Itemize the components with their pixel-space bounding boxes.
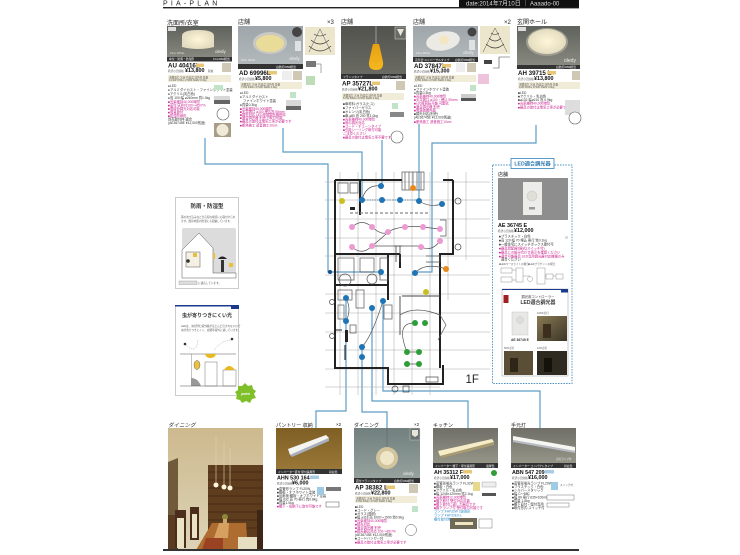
product: 店舗 downlight ×3: ファインホワイト塗装 — [243, 98, 277, 103]
product: 洗面所/衣室: 消費電力 光束 色温度 演色性 質量 — [169, 76, 209, 80]
product: ダイニング pendant ×2 — [354, 422, 420, 544]
product: 玄関ホール: ■LED — [518, 91, 527, 95]
product: ダイニング pendant ×2: ■調光器具対応 100〜85/7% — [355, 528, 396, 534]
product: 店舗 downlight ×3: AD 69996L — [239, 70, 271, 77]
panel: LED適合調光器: ■器具との組み合わせ表示を確認ください — [499, 250, 561, 254]
product: 店舗 downlight ×3: oledy — [289, 56, 301, 61]
product: パントリー 収納 — [276, 422, 342, 508]
product: キッチン: ■棚下ランプ付 壁付取付可能です — [434, 505, 484, 510]
panel: 防雨・防湿型: 雨の吹き込みなどが心配な場所にも取付けられ — [181, 215, 236, 219]
product: 店舗 universal downlight ×2: ■光束維持40,000時間 — [414, 94, 447, 98]
product: キッチン: 棚付取付時 — [434, 516, 451, 522]
product: 店舗 pendant: ■光束維持40,000時間 — [343, 116, 376, 122]
product: 手元灯: 希望小売価格 — [512, 476, 528, 480]
panel: LED適合調光器: ■適合可能器具 LED専用調光器対応機種のみ — [499, 254, 565, 258]
photo: ダイニング — [168, 422, 263, 550]
product: 店舗 downlight ×3: ■器具の取付は電気工事が必要です — [240, 118, 292, 124]
product: キッチン: インバーター 棚下・壁付兼用形 — [435, 464, 475, 468]
product: 手元灯: ABN 547 209 — [512, 470, 545, 476]
panel: LED適合調光器: 適合ください — [501, 256, 521, 262]
panel: 防雨・防湿型 — [176, 198, 238, 288]
panel: LED適合調光器: ■LEDベースライトの場合 — [499, 262, 529, 266]
product: 店舗 pendant: 店舗 — [341, 18, 353, 26]
product: ダイニング pendant ×2: 白熱灯60W相当 — [394, 479, 414, 483]
product: ダイニング pendant ×2: ■適合調光器 別売 — [355, 525, 382, 530]
product: 店舗 pendant: 白熱灯60W相当 — [382, 75, 402, 79]
product: 店舗 universal downlight ×2: 白熱灯60W相当 — [455, 58, 475, 62]
product: 店舗 downlight ×3: ●LED — [240, 91, 249, 95]
wiring diagram — [501, 268, 563, 284]
product: ダイニング pendant ×2: ■光束維持40,000時間 — [355, 518, 388, 523]
product: 洗面所/衣室: 13.3W 970lm 2700K Ra82 0.9kg — [169, 78, 207, 82]
product: 店舗 pendant: 希望小売価格 — [342, 88, 358, 92]
product: 店舗 downlight ×3 — [238, 18, 335, 128]
product: キッチン: 希望小売価格 — [434, 476, 450, 480]
panel: 防雨・防湿型: に適応しています。 — [198, 281, 221, 285]
lighting markers: pink — [349, 224, 443, 250]
product: 店舗 pendant: ¥21,800 — [358, 86, 378, 92]
product: 店舗 downlight ×3: ●アルミダイカスト — [240, 94, 268, 99]
product: 店舗 downlight ×3: 店舗 — [238, 18, 250, 26]
product: 店舗 universal downlight ×2: ×2 — [504, 20, 512, 26]
product: キッチン: 電球色 — [486, 464, 495, 468]
lighting markers: green — [404, 320, 428, 367]
product: 店舗 pendant: フランジタイプ — [343, 75, 363, 79]
dimmer photo — [498, 178, 568, 220]
product: 洗面所/衣室: 傘付・防雨・防湿形 — [169, 57, 194, 61]
product: 手元灯: 手元灯 — [511, 422, 526, 429]
connector lines — [205, 124, 540, 428]
product: 店舗 universal downlight ×2: ■電源装置内蔵 — [414, 108, 436, 112]
inner card: LED適合調光器: 50%点灯 — [504, 346, 515, 350]
product: 店舗 universal downlight ×2: (AE36745E ¥12,000別途) — [414, 114, 451, 120]
product: ダイニング pendant ×2: ■調光対応 — [355, 522, 371, 526]
panel: 虫が寄りつきにくい光: 虫が寄りつきにくい光 — [182, 312, 232, 319]
product: 洗面所/衣室: Fine White — [170, 51, 185, 55]
product: ダイニング pendant ×2: (AE36745E ¥12,000別途) — [355, 532, 392, 537]
product: パントリー 収納: 昼白色 — [329, 470, 338, 474]
photo: ダイニング: ダイニング — [168, 422, 197, 429]
panel: LED適合調光器: ■一般住宅にスイッチボックス取付可 — [499, 242, 554, 246]
product: 店舗 downlight ×3: 消費電力 光束 色温度 演色性 質量 — [241, 82, 281, 86]
product: 洗面所/衣室: 洗面所/衣室 — [167, 19, 199, 27]
product: 店舗 universal downlight ×2: ■適合調光器 別売 — [414, 104, 441, 109]
inner card: LED適合調光器: LED適合調光器 — [520, 299, 556, 306]
product: 洗面所/衣室: ■光束維持40,000時間 — [168, 99, 201, 104]
product: 玄関ホール: 10W 900lm 2700K Ra82 0.9kg — [519, 85, 555, 89]
panel: LED適合調光器 — [492, 158, 572, 384]
inner card: LED適合調光器: 10%点灯 — [537, 346, 548, 350]
point badge: point — [241, 392, 251, 396]
product: 洗面所/衣室: ●LED — [168, 84, 177, 88]
product: ダイニング pendant ×2: ■器具の取付は電気工事が必要です — [355, 540, 407, 544]
product: 洗面所/衣室: ■簡易取付 — [168, 110, 184, 114]
product: キッチン: ■棚下取付 壁付対応可能 — [434, 498, 471, 503]
panel: LED適合調光器: ¥12,000 — [514, 228, 534, 234]
product: 玄関ホール: ■器具の取付は電気工事が必要です — [518, 104, 570, 110]
product: 玄関ホール: AH 39715 L — [518, 70, 552, 77]
product: 店舗 downlight ×3: 希望小売価格 — [239, 77, 255, 81]
product: キッチン: ランプ FHF32EX-L — [434, 512, 462, 518]
product: パントリー 収納: ■棚下・収納下に取付可能です — [277, 504, 323, 508]
product: 洗面所/衣室: 税抜 — [208, 69, 214, 73]
product: 店舗 downlight ×3: ■光束維持40,000時間 — [240, 106, 273, 111]
product: 店舗 downlight ×3: ¥5,800 — [255, 76, 272, 82]
product: 店舗 universal downlight ×2: 高気密 ユニバーサルタイプ — [415, 58, 449, 62]
product: 店舗 universal downlight ×2: ■±20度回転可能 可動式 — [414, 100, 449, 106]
product: 店舗 universal downlight ×2: AD 37847L — [414, 63, 446, 70]
product: キッチン: ■アクリル・乳白色 — [434, 488, 463, 492]
floor plan grid — [325, 172, 490, 395]
product: パントリー 収納: パントリー 収納 — [276, 422, 313, 429]
product: 洗面所/衣室: oledy — [215, 49, 227, 54]
panel: LED適合調光器: ■高 120 幅 70 埋込 奥行 質0.1kg — [499, 238, 547, 242]
panel: LED適合調光器: ■器具間配線2線式(スイッチ付) — [499, 246, 545, 250]
lighting markers: orange — [410, 185, 449, 272]
floor label: 1F — [466, 374, 479, 386]
page header: PIA-PLAN — [163, 0, 220, 8]
product: 店舗 downlight ×3: Fine White — [241, 58, 256, 62]
product: 手元灯: 昼白色 — [564, 464, 573, 468]
product: 店舗 downlight ×3: ■調光対応 LED専用調光器併用 — [240, 112, 286, 117]
product: ダイニング pendant ×2: ×2 — [414, 422, 420, 427]
product: 手元灯: 点灯ランプ付 — [556, 457, 572, 461]
product: キッチン: ■直管形蛍光ランプ FL32W — [434, 480, 475, 486]
panel: LED適合調光器: AE 36745 E — [498, 223, 527, 229]
product: パントリー 収納: インバーター直付 壁付兼用形 — [278, 470, 315, 474]
product: パントリー 収納: AHN 530 164 — [277, 476, 310, 482]
lighting markers: yellow — [339, 198, 429, 295]
product: 玄関ホール: ■アクリル・乳白色 — [518, 94, 547, 98]
product: 店舗 downlight ×3: 7.0W 640lm 2700K Ra82 0.3kg — [241, 85, 278, 89]
product: 玄関ホール: 玄関ホール — [517, 18, 547, 26]
product: 玄関ホール: 消費電力 光束 色温度 演色性 質量 — [519, 82, 559, 86]
product: ダイニング pendant ×2: AP 38382 L — [355, 484, 388, 492]
product: 店舗 downlight ×3: ■天井開口 ⌀100 埋込高 55mm — [240, 109, 285, 114]
product: 店舗 downlight ×3: ■適合調光器 別売で取付可能 — [240, 115, 283, 120]
product: 玄関ホール: ■⌀132 幅⌀210 高 0.9kg — [518, 97, 553, 102]
product: 店舗 universal downlight ×2: ■天井開口 ⌀100・埋込 90mm — [414, 97, 458, 102]
product: 店舗 universal downlight ×2: ●LED — [414, 84, 423, 88]
product: 店舗 pendant: ■傘 ⌀80 高 200 質1.0kg — [343, 113, 378, 118]
product: キッチン: ■鋼板・白色 — [434, 484, 453, 489]
product: パントリー 収納: ×2 — [336, 422, 342, 427]
product: キッチン: キッチン — [433, 423, 453, 429]
inner card: LED適合調光器 — [502, 289, 568, 376]
panel: 防雨・防湿型: ます。器具内部の防湿にも配慮しています。 — [181, 219, 232, 223]
product: 店舗 pendant: ■オレンジ(乳白色) — [343, 109, 370, 114]
product: パントリー 収納: ¥6,000 — [292, 480, 308, 486]
product: 洗面所/衣室: 別売取付枠 適合 — [168, 116, 193, 122]
product: パントリー 収納: ■反射板:鋼板・オフホワイト塗装 — [277, 493, 327, 498]
panel: LED適合調光器: ■プラスチック・白色 — [499, 234, 531, 238]
panel: LED適合調光器: 希望小売価格 — [498, 229, 514, 233]
product: キッチン: AH 35312 F — [434, 470, 464, 476]
product: キッチン: ■棚下取付に適した器具です — [434, 502, 476, 506]
product: 洗面所/衣室 — [167, 19, 233, 137]
product: 店舗 pendant: ■傘材料:ガラス(ヒス) — [343, 101, 374, 106]
inner card: LED適合調光器: 調光用コントローラー — [522, 294, 554, 299]
product: 店舗 pendant: ■ファイバーガラス — [343, 105, 371, 110]
product: 洗面所/衣室: ●高 100 幅 ⌀240mm 質1.0kg — [168, 95, 210, 100]
product: 店舗 downlight ×3: ■断熱施工 遮音施工10cm — [240, 122, 278, 128]
product: 洗面所/衣室: AU 40416L — [168, 62, 200, 70]
product: 洗面所/衣室: ■電球色調光対応可能 — [168, 106, 200, 111]
page header: date:2014年7月10日 ｜ Aaaado-00 — [466, 0, 560, 8]
product: 店舗 pendant: 6.3W 580lm 2700K Ra82 0.4kg — [343, 96, 380, 100]
product: 店舗 universal downlight ×2: ■断熱施工 遮音施工10cm — [414, 119, 452, 124]
product: 洗面所/衣室: ●アルミダイカスト・ファインホワイト塗装 — [168, 87, 233, 92]
inner card: LED適合調光器: AE 36745 E — [511, 338, 530, 342]
product: 手元灯: ¥16,000 — [528, 475, 548, 481]
product: 手元灯: ■質量 1.8kg — [512, 498, 530, 503]
product: 店舗 universal downlight ×2: Fine White — [416, 51, 431, 55]
product: 玄関ホール — [517, 18, 581, 124]
product: 店舗 universal downlight ×2: 6.8W 400lm 2700K Ra82 0.3kg — [415, 78, 452, 82]
product: ダイニング pendant ×2: oledy — [403, 471, 415, 476]
product: 洗面所/衣室: FCL30W相当 — [213, 57, 230, 61]
product: ダイニング pendant ×2: 直付フランジタイプ — [356, 479, 381, 483]
panel: 防雨・防湿型: 防雨・防湿型 — [190, 202, 224, 210]
product: 店舗 universal downlight ×2: oledy — [463, 50, 475, 55]
product: パントリー 収納: ■幅 632 高 70 奥行 質0.8kg — [277, 496, 317, 502]
product: 店舗 pendant: ■風の調光対応 — [343, 120, 365, 125]
product: パントリー 収納: ■直管形ランプ FL20W — [277, 486, 311, 491]
inner card: LED適合調光器: 100%点灯 — [537, 311, 549, 315]
panel title: LED適合調光器 — [514, 160, 551, 168]
product: 洗面所/衣室: ■防湿防雨形 — [168, 113, 187, 118]
product: 玄関ホール: ¥13,800 — [534, 76, 554, 82]
product: ダイニング pendant ×2: 6.5W 520lm 2700K Ra82 0.9kg — [356, 499, 393, 503]
product: 店舗 downlight ×3: 白熱灯60W相当 — [276, 65, 296, 69]
product: 店舗 pendant: AP 35727L — [342, 80, 373, 88]
product: 玄関ホール: oledy — [564, 58, 576, 64]
product: 店舗 pendant: 消費電力 光束 色温度 演色性 質量 — [343, 94, 383, 98]
product: パントリー 収納: ■鋼板・オフホワイト塗装 — [277, 490, 316, 494]
product: 手元灯: インバーター コンパクトタイプ — [513, 464, 553, 468]
product: 玄関ホール: ■光束維持40,000時間 — [518, 100, 551, 106]
product: 手元灯: ■幅 C〜88C — [512, 491, 531, 496]
product: 手元灯: ■直管形蛍光ランプ FL20W — [512, 480, 553, 486]
product: キッチン: ¥17,000 — [450, 475, 470, 481]
panel: 虫が寄りつきにくい光: LEDは、虫が好む紫外線がほとんど含まれないので — [181, 324, 241, 328]
product: 店舗 downlight ×3: ●質量0.3kg — [240, 102, 257, 107]
product: 洗面所/衣室: (AE36745E ¥12,000別途) — [168, 120, 205, 125]
product: 店舗 universal downlight ×2: ¥15,300 — [430, 68, 450, 74]
panel title — [511, 158, 554, 168]
panel: LED適合調光器: 店舗 — [498, 171, 508, 178]
product: 店舗 universal downlight ×2 — [413, 18, 512, 124]
product: キッチン — [433, 423, 498, 529]
product: パントリー 収納: ■質量1.0kg — [277, 500, 294, 505]
product: 手元灯 — [511, 422, 576, 510]
product: 店舗 universal downlight ×2: 消費電力 光束 色温度 演色性 質量 — [415, 76, 455, 80]
product: ダイニング pendant ×2: 消費電力 光束 色温度 演色性 質量 — [356, 496, 396, 500]
panel: 虫が寄りつきにくい光 — [175, 305, 241, 396]
product: ダイニング pendant ×2: ダイニング — [354, 422, 379, 429]
product: 店舗 downlight ×3: ×3 — [327, 20, 335, 26]
product: キッチン: ■光束維持12,000時間 — [434, 494, 467, 500]
product: 洗面所/衣室: 希望小売価格 — [168, 69, 184, 73]
product: 店舗 universal downlight ×2: ●質量0.3kg — [414, 90, 431, 95]
product: ダイニング pendant ×2: 希望小売価格 — [355, 492, 371, 496]
panel: LED適合調光器: ■LEDブラケットの場合 — [528, 262, 556, 266]
point badge — [235, 383, 256, 403]
product: キッチン: ■幅 1245×120mm 質2.1kg — [434, 491, 473, 496]
product: ダイニング pendant ×2: ■幅 ⌀118 高 1000〜1500 質0.9kg — [355, 514, 404, 520]
product: 手元灯: ■プラスチック・白色 — [512, 484, 544, 489]
panel: 虫が寄りつきにくい光: 虫が寄りつきにくく、玄関等屋外に適しています。 — [181, 328, 240, 332]
product: キッチン: ランプ:FHF32W 3波長形 — [434, 508, 471, 514]
product: 手元灯: スイッチ付 — [560, 483, 573, 487]
product: 店舗 pendant — [341, 18, 406, 143]
product: 店舗 pendant: ■コード・チェーンタイプ — [343, 124, 382, 128]
product: ダイニング pendant ×2: ■LED — [355, 505, 364, 509]
product: ダイニング pendant ×2: ■コードハンガー付 — [355, 536, 384, 540]
product: 玄関ホール: 白熱灯60W相当 — [556, 65, 576, 69]
floor plan — [328, 172, 479, 392]
product: 手元灯: ■棚下直付・壁付専用 — [512, 502, 544, 506]
product: ダイニング pendant ×2: ■コード・グレー — [355, 508, 380, 512]
floor plan walls — [335, 180, 453, 384]
product: 洗面所/衣室: ¥13,800 — [185, 68, 204, 74]
product: 手元灯: ■シルバーメタリック — [512, 488, 544, 492]
lighting markers: blue — [328, 183, 445, 360]
product: 店舗 pendant: ■器具の取付は電気工事不要です — [343, 134, 392, 140]
product: 店舗 universal downlight ×2: 希望小売価格 — [414, 70, 430, 74]
page header — [163, 0, 579, 8]
product: 洗面所/衣室: ●アクリル(乳白色) — [168, 91, 195, 96]
bottom rule — [163, 549, 579, 551]
product: 店舗 universal downlight ×2: ■調光対応(別売) — [414, 111, 438, 116]
product: 手元灯: ■取付形式:スイッチ付 — [512, 505, 545, 510]
product: 玄関ホール: 希望小売価格 — [518, 77, 534, 81]
product: ダイニング pendant ×2: ■ガラス(透明) — [355, 511, 376, 516]
product: ダイニング pendant ×2: ¥22,800 — [371, 490, 390, 496]
product: 店舗 universal downlight ×2: 店舗 — [413, 18, 425, 26]
product: 店舗 pendant: ご注意ください — [343, 130, 367, 136]
product: 店舗 universal downlight ×2: ●ファインホワイト塗装 — [414, 86, 450, 92]
product: 店舗 pendant: ■引掛シーリング取付可能 — [343, 127, 382, 132]
product: パントリー 収納: 希望小売価格 — [277, 482, 293, 486]
product: 洗面所/衣室: ■直付/天井付100〜85/7% — [168, 102, 206, 108]
product: 手元灯: ■幅 89 奥行 635×100mm — [512, 494, 549, 500]
